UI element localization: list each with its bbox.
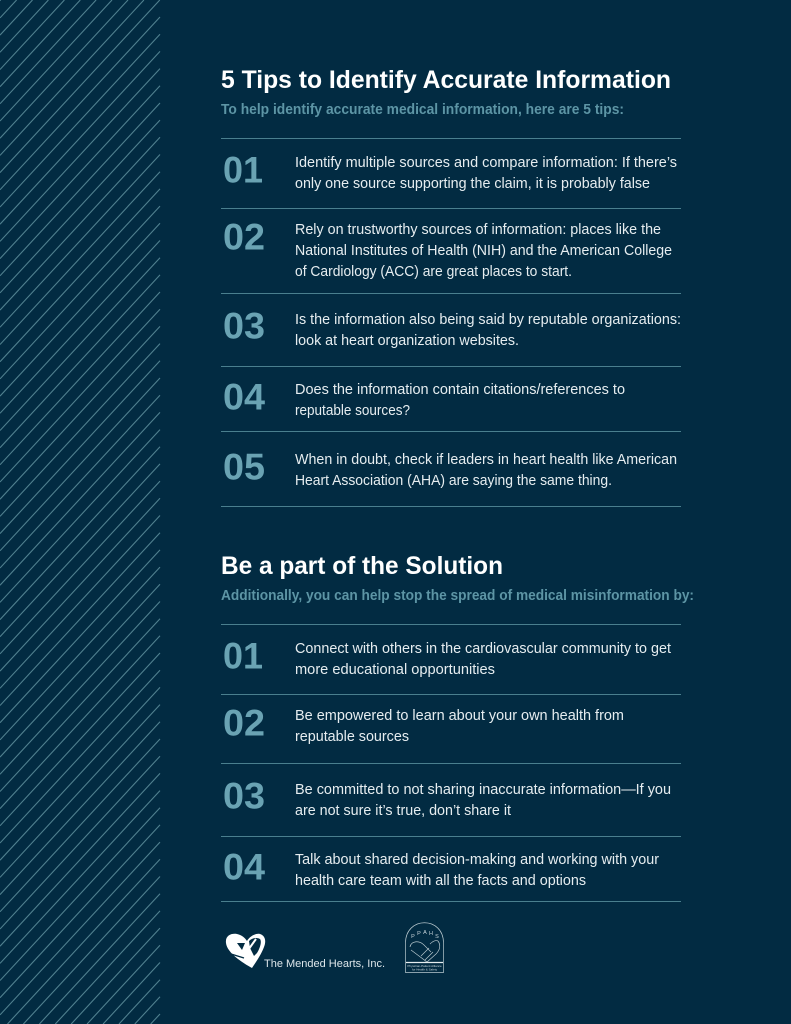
tip 02: 02	[223, 216, 265, 258]
solution 01	[223, 636, 671, 678]
tip 03	[223, 306, 681, 349]
tip 01: Identify multiple sources and compare information: If there’s	[295, 155, 677, 171]
tip 05: When in doubt, check if leaders in heart health like American	[295, 452, 677, 468]
solution 02: Be empowered to learn about your own health from	[295, 708, 624, 724]
logo: PPAHS: H	[429, 931, 433, 937]
section: be a part of the solution	[221, 552, 694, 902]
logo: The Mended Hearts	[226, 934, 385, 970]
solution 01: 01	[223, 636, 263, 676]
logo: PPAHS: A	[423, 930, 427, 936]
logo: PPAHS: P	[417, 931, 421, 937]
solution 04: health care team with all the facts and options	[295, 873, 586, 889]
logo: PPAHS	[406, 923, 444, 972]
tip 05	[223, 446, 677, 489]
solution 04	[223, 846, 659, 889]
tip 01: only one source supporting the claim, it is probably false	[295, 176, 650, 192]
solution 03: are not sure it’s true, don’t share it	[295, 803, 511, 819]
logo: PPAHS: S	[435, 934, 439, 940]
tip 02: Rely on trustworthy sources of information: places like the	[295, 222, 661, 238]
tip 03: look at heart organization websites.	[295, 333, 519, 349]
icon: heart	[226, 934, 265, 968]
tip 02: of Cardiology (ACC) are great places to start.	[295, 264, 572, 280]
solution 04: 04	[223, 846, 265, 888]
heading: 5 tips: 5 Tips to Identify Accurate Information	[221, 66, 671, 94]
subheading: solution: Additionally, you can help stop the spread of medical misinformation by:	[221, 588, 694, 604]
solution 02: reputable sources	[295, 729, 409, 745]
tip 04	[223, 376, 625, 419]
tip 03: 03	[223, 306, 265, 346]
tip 02: National Institutes of Health (NIH) and the American College	[295, 243, 672, 259]
logo: The Mended Hearts: The Mended Hearts, Inc.	[264, 958, 385, 970]
heading: solution: Be a part of the Solution	[221, 552, 503, 580]
solution 02	[223, 702, 624, 745]
tip 05: 05	[223, 446, 265, 488]
tip 04: Does the information contain citations/references to	[295, 382, 625, 398]
tip 04: reputable sources?	[295, 403, 410, 419]
solution 04: Talk about shared decision-making and working with your	[295, 852, 659, 868]
logo: PPAHS: for Health & Safety	[412, 968, 438, 972]
section: 5 tips	[221, 66, 681, 506]
subheading: 5 tips: To help identify accurate medical information, here are 5 tips:	[221, 102, 624, 118]
tip 05: Heart Association (AHA) are saying the same thing.	[295, 473, 612, 489]
logo: PPAHS: P	[411, 934, 415, 940]
solution 01: more educational opportunities	[295, 662, 495, 678]
solution 01: Connect with others in the cardiovascular community to get	[295, 641, 671, 657]
tip 02	[223, 216, 672, 280]
tip 04: 04	[223, 376, 265, 418]
diagonal stripe panel	[0, 0, 160, 1024]
tip 01: 01	[223, 150, 263, 190]
tip 01	[223, 150, 677, 192]
tip 03: Is the information also being said by reputable organizations:	[295, 312, 681, 328]
solution 03: 03	[223, 776, 265, 816]
solution 03: Be committed to not sharing inaccurate information—If you	[295, 782, 671, 798]
logo: PPAHS: Physician-Patient Alliance	[407, 964, 442, 968]
solution 02: 02	[223, 702, 265, 744]
solution 03	[223, 776, 671, 819]
